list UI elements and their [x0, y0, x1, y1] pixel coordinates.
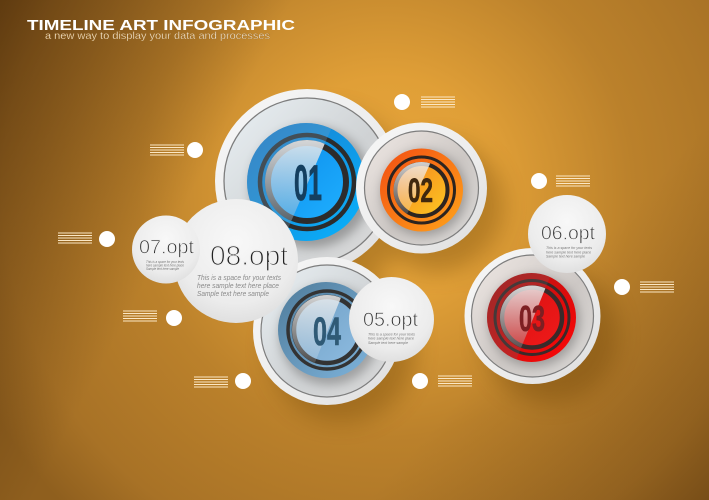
bubble 06.opt: 06.opt	[541, 222, 596, 244]
marker: bottom left	[194, 373, 251, 389]
number 03: 03	[519, 298, 545, 339]
bubble 06.opt: This is a space for your texts	[546, 246, 592, 250]
bubble 07.opt: here sample text here place	[146, 264, 184, 268]
marker: right lower	[614, 279, 674, 295]
bubble 08.opt: 08.opt	[210, 240, 288, 271]
dial 02: orange	[356, 122, 487, 254]
title block	[27, 17, 295, 42]
bubble 07.opt: 07.opt	[139, 236, 195, 258]
bubble 06.opt: here sample text here place	[546, 250, 591, 254]
cast shadows	[235, 110, 618, 422]
number 04: 04	[313, 310, 341, 354]
bubble 08.opt: here sample text here place	[197, 283, 279, 290]
marker: upper left	[150, 142, 203, 158]
number 02: 02	[408, 172, 433, 210]
marker: far left	[58, 231, 115, 247]
dial 01: blue	[215, 89, 386, 263]
dial 04: steel blue	[253, 257, 401, 405]
title: TIMELINE ART INFOGRAPHIC	[27, 17, 295, 34]
bubble 08.opt: Sample text here sample	[197, 291, 269, 298]
bubble 07.opt	[132, 216, 200, 284]
bubble 07.opt: This is a space for your texts	[146, 260, 184, 264]
bubble 05.opt: here sample text here place	[368, 336, 414, 340]
marker: bottom centre	[412, 373, 472, 389]
dial 03: red	[464, 248, 600, 384]
marker: lower left	[123, 310, 182, 326]
bubble 05.opt: This is a space for your texts	[368, 332, 415, 336]
bubble 06.opt	[528, 195, 606, 273]
marker: right upper	[531, 173, 590, 189]
bubble 08.opt	[174, 199, 298, 323]
bubble 05.opt: 05.opt	[363, 309, 419, 331]
subtitle: a new way to display your data and processes	[45, 30, 270, 42]
marker: top centre	[394, 94, 455, 110]
bubble 07.opt: Sample text here sample	[146, 267, 179, 271]
bubble 05.opt	[349, 277, 434, 362]
bubble 06.opt: Sample text here sample	[546, 254, 585, 258]
number 01: 01	[294, 155, 322, 211]
bubble 05.opt: Sample text here sample	[368, 341, 408, 345]
bubble 08.opt: This is a space for your texts	[197, 275, 281, 282]
